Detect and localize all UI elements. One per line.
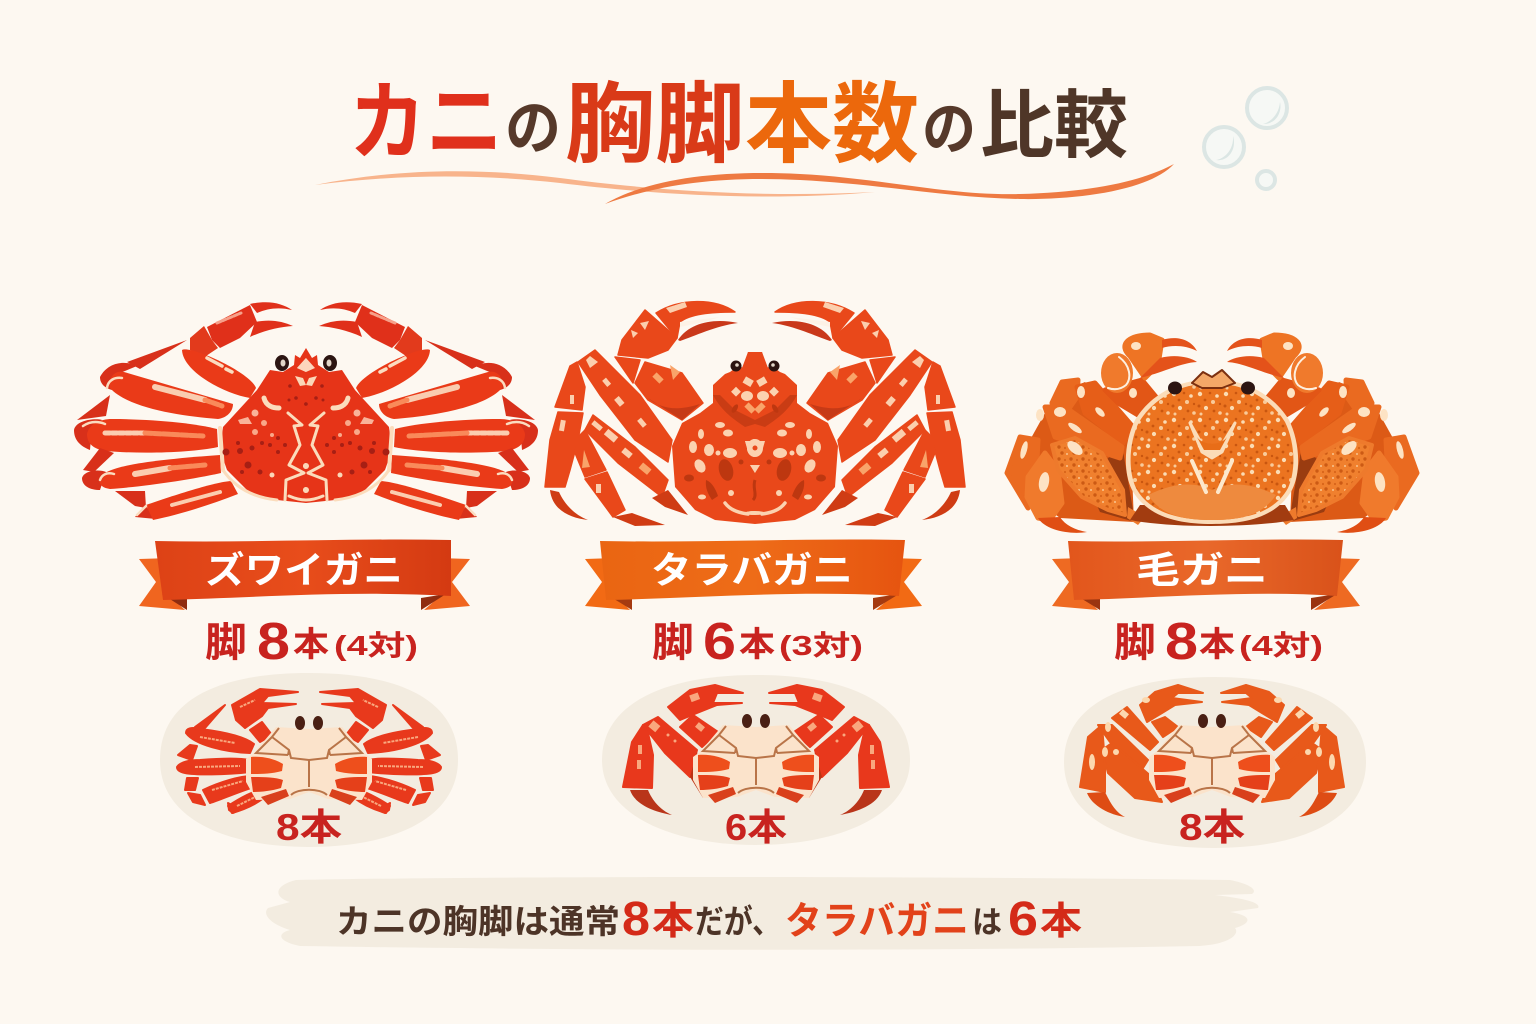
panel: underside タラバガニ: 6本: [725, 807, 787, 848]
panel: underside ズワイガニ: 8本: [276, 807, 342, 848]
leg count label: ズワイガニ: 脚: [205, 621, 247, 665]
summary text: カニの胸脚は通常: [336, 903, 620, 940]
icon: bubbles: [1204, 88, 1287, 189]
leg count label: タラバガニ: (3対): [779, 630, 863, 661]
title: の: [922, 97, 976, 162]
title: カニ: [349, 75, 503, 171]
leg count label: 毛ガニ: [1114, 613, 1323, 671]
leg count label: ズワイガニ: 8: [257, 613, 290, 671]
leg count label: タラバガニ: 6: [703, 613, 736, 671]
leg count label: ズワイガニ: 本: [293, 626, 329, 664]
title: 比較: [980, 84, 1128, 167]
ribbon: タラバガニ: タラバガニ: [651, 550, 853, 591]
summary text: 8: [622, 893, 650, 946]
leg count label: ズワイガニ: (4対): [334, 630, 418, 661]
leg count label: 毛ガニ: (4対): [1239, 630, 1323, 661]
panel: underside タラバガニ: [602, 675, 910, 848]
ribbon: ズワイガニ: [139, 540, 470, 610]
leg count label: 毛ガニ: 8: [1165, 613, 1198, 671]
crab: タラバガニ: [545, 302, 965, 526]
bottom summary band: [266, 877, 1258, 950]
panel: underside 毛ガニ: 8本: [1179, 807, 1245, 848]
leg count label: タラバガニ: [652, 613, 863, 671]
summary text: だが、: [695, 903, 781, 940]
title: 本数: [745, 75, 919, 174]
leg count label: ズワイガニ: [205, 613, 418, 671]
title: の: [505, 95, 561, 162]
summary text: [336, 893, 1082, 946]
summary text: タラバガニ: [785, 901, 969, 943]
leg count label: 毛ガニ: 本: [1199, 626, 1235, 664]
ribbon: 毛ガニ: 毛ガニ: [1136, 550, 1268, 591]
title: [349, 75, 1128, 174]
panel: underside ズワイガニ: [160, 673, 458, 848]
crab: ズワイガニ: [74, 302, 538, 520]
panel: underside 毛ガニ: [1064, 677, 1366, 848]
title: 胸脚: [565, 75, 745, 174]
leg count label: タラバガニ: 本: [739, 626, 775, 664]
summary text: 本: [1040, 901, 1082, 943]
leg count label: 毛ガニ: 脚: [1114, 621, 1156, 665]
summary text: 6: [1008, 893, 1038, 946]
crab: 毛ガニ: [1007, 335, 1417, 533]
leg count label: タラバガニ: 脚: [652, 621, 694, 665]
summary text: 本: [652, 901, 694, 943]
summary text: は: [972, 905, 1002, 940]
title underline swoosh: [315, 164, 1174, 204]
ribbon: ズワイガニ: ズワイガニ: [205, 550, 403, 591]
ribbon: 毛ガニ: [1052, 540, 1360, 610]
ribbon: タラバガニ: [585, 540, 922, 610]
